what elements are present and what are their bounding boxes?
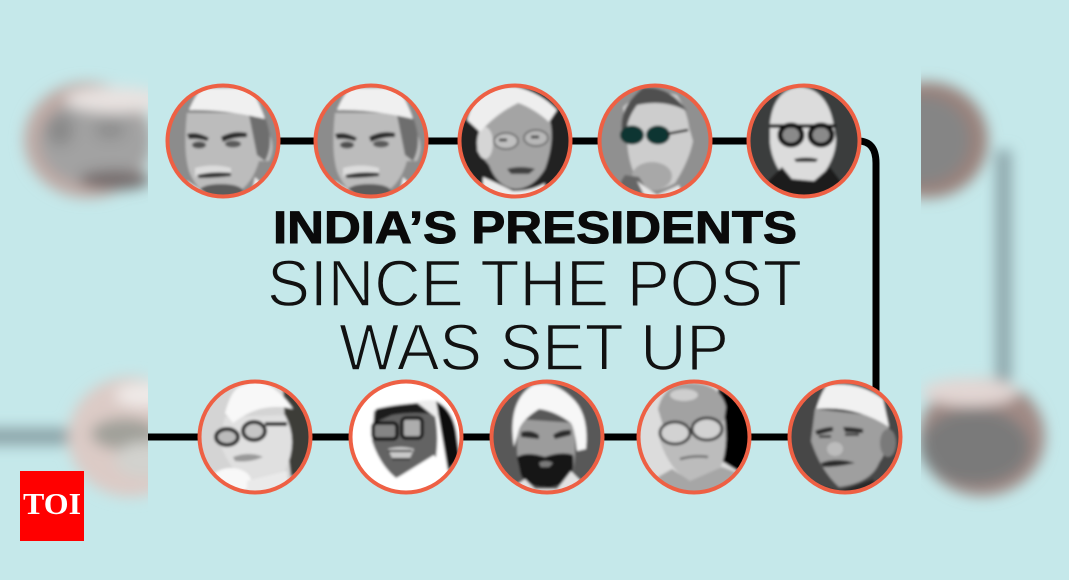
portrait 6 bbox=[199, 381, 311, 497]
portrait ring bbox=[492, 382, 602, 492]
portrait ring bbox=[350, 382, 462, 492]
connector line: top row and right bend bbox=[223, 141, 876, 395]
portrait ring bbox=[638, 382, 750, 492]
portrait 5 bbox=[748, 85, 860, 201]
portrait 8 bbox=[491, 381, 603, 497]
title bbox=[267, 202, 802, 384]
heading line 1: INDIA’S PRESIDENTS bbox=[273, 202, 797, 253]
portrait 2 bbox=[315, 85, 427, 198]
portrait 7 bbox=[350, 381, 462, 497]
portrait 1 bbox=[167, 85, 279, 198]
portrait ring bbox=[200, 382, 310, 492]
infographic canvas bbox=[0, 73, 1054, 541]
TOI logo bbox=[20, 471, 84, 541]
portrait 10 bbox=[789, 381, 901, 497]
portrait 4 bbox=[599, 85, 711, 201]
connector line: bottom row bbox=[148, 434, 845, 440]
portrait ring bbox=[168, 86, 278, 196]
portrait 9 bbox=[638, 381, 750, 497]
portrait ring bbox=[790, 382, 900, 492]
heading line 2: SINCE THE POST bbox=[267, 246, 802, 320]
portrait 3 bbox=[459, 85, 571, 201]
portrait ring bbox=[600, 86, 710, 196]
portrait ring bbox=[748, 86, 860, 196]
TOI logo: TOI bbox=[23, 486, 81, 521]
portrait ring bbox=[316, 86, 426, 196]
portrait ring bbox=[460, 86, 570, 196]
central panel bbox=[148, 0, 921, 580]
heading line 3: WAS SET UP bbox=[339, 310, 729, 384]
blurred left and right backdrop bbox=[0, 82, 1045, 497]
